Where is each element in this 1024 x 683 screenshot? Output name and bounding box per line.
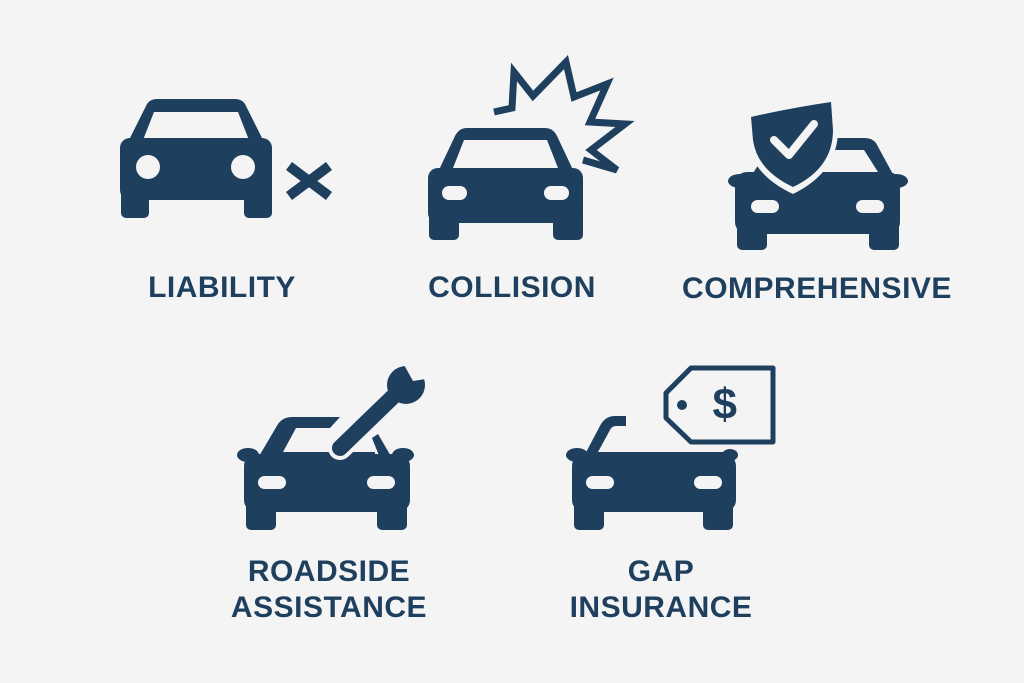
icon: gap insurance car with price tag: $ [713,380,737,429]
label: gap insurance: GAP [628,555,694,588]
icon: liability car with x [120,99,329,218]
icon: gap insurance car with price tag [566,365,776,530]
label: liability: LIABILITY [148,271,296,304]
label: gap insurance: INSURANCE [570,591,752,624]
icon: collision car with starburst [428,62,625,240]
label: roadside assistance: ROADSIDE [248,555,410,588]
label: comprehensive: COMPREHENSIVE [682,272,952,305]
icon: comprehensive car with shield [728,96,908,250]
label: collision: COLLISION [428,271,596,304]
icon: roadside car with wrench [237,360,432,530]
label: roadside assistance: ASSISTANCE [231,591,427,624]
